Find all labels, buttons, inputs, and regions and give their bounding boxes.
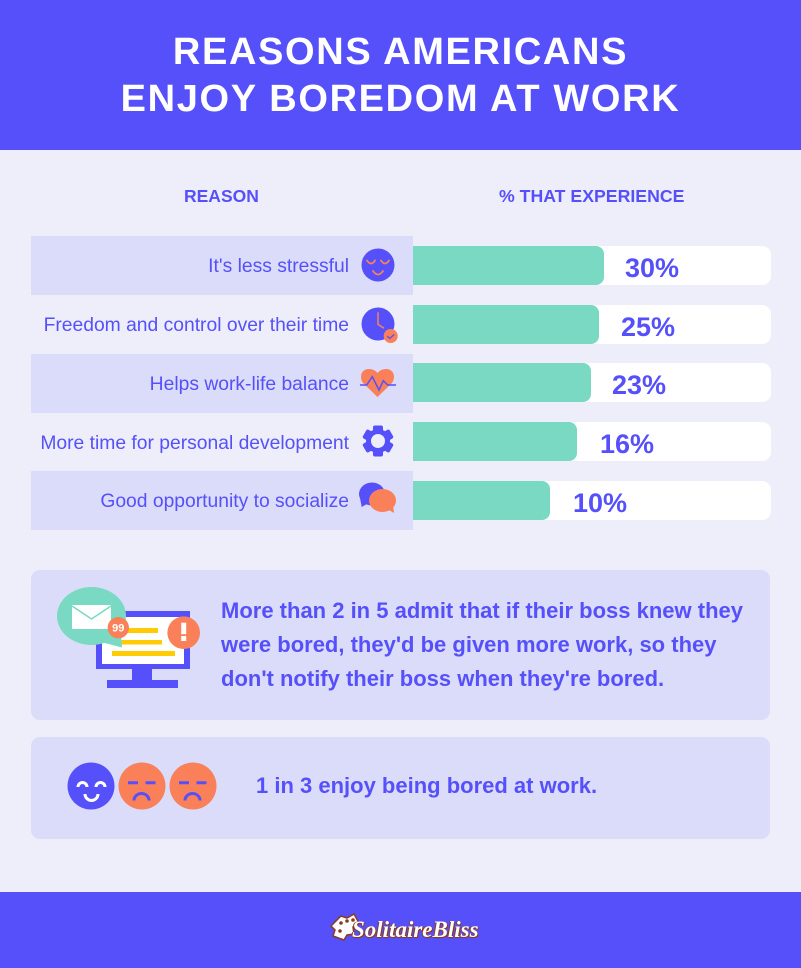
column heading: percent: % THAT EXPERIENCE bbox=[499, 186, 684, 206]
label 4: More time for personal development bbox=[40, 433, 349, 454]
callout text: were bored, they'd be given more work, so they bbox=[221, 632, 716, 657]
value 25%: 25% bbox=[621, 312, 675, 342]
icon: cards bbox=[330, 913, 359, 941]
value 10%: 10% bbox=[573, 488, 627, 518]
icon: sad face bbox=[170, 762, 216, 810]
title: ENJOY BOREDOM AT WORK bbox=[121, 78, 680, 120]
panel: one in three bbox=[31, 737, 770, 839]
value 16%: 16% bbox=[600, 429, 654, 459]
row band 1 bbox=[31, 236, 413, 295]
value 30%: 30% bbox=[625, 253, 679, 283]
footer band bbox=[0, 892, 801, 968]
icon: sad face bbox=[118, 762, 166, 810]
title bbox=[121, 31, 680, 120]
icon: chat bubbles bbox=[359, 482, 396, 513]
callout text: More than 2 in 5 admit that if their boss knew they bbox=[221, 598, 743, 623]
callout text: 1 in 3 enjoy being bored at work. bbox=[256, 773, 597, 798]
label 2: Freedom and control over their time bbox=[44, 315, 349, 336]
bar 25% bbox=[413, 305, 771, 344]
value 23%: 23% bbox=[612, 370, 666, 400]
wordmark: SolitaireBliss bbox=[352, 917, 479, 942]
callout text bbox=[221, 598, 743, 691]
icon: relaxed face bbox=[362, 248, 394, 282]
icon: happy face bbox=[68, 762, 114, 810]
bar 30% bbox=[413, 246, 771, 285]
bar 23% bbox=[413, 363, 771, 402]
callout text: don't notify their boss when they're bored. bbox=[221, 666, 664, 691]
icon: monitor with message: 99 bbox=[112, 623, 124, 635]
logo bbox=[330, 913, 479, 942]
bar 10% bbox=[413, 481, 771, 520]
icon: monitor with message bbox=[57, 587, 200, 688]
title: REASONS AMERICANS bbox=[173, 31, 628, 73]
icon: heart with pulse bbox=[360, 369, 396, 397]
label 5: Good opportunity to socialize bbox=[100, 491, 349, 512]
bar 16% bbox=[413, 422, 771, 461]
icon: gear bbox=[362, 426, 394, 456]
label 3: Helps work-life balance bbox=[150, 374, 349, 395]
column heading: reason: REASON bbox=[184, 186, 259, 206]
row band 3 bbox=[31, 354, 413, 413]
header band bbox=[0, 0, 801, 150]
row band 5 bbox=[31, 471, 413, 530]
panel: boss callout bbox=[31, 570, 770, 720]
icon: clock with check bbox=[362, 308, 398, 343]
label 1: It's less stressful bbox=[208, 256, 349, 277]
